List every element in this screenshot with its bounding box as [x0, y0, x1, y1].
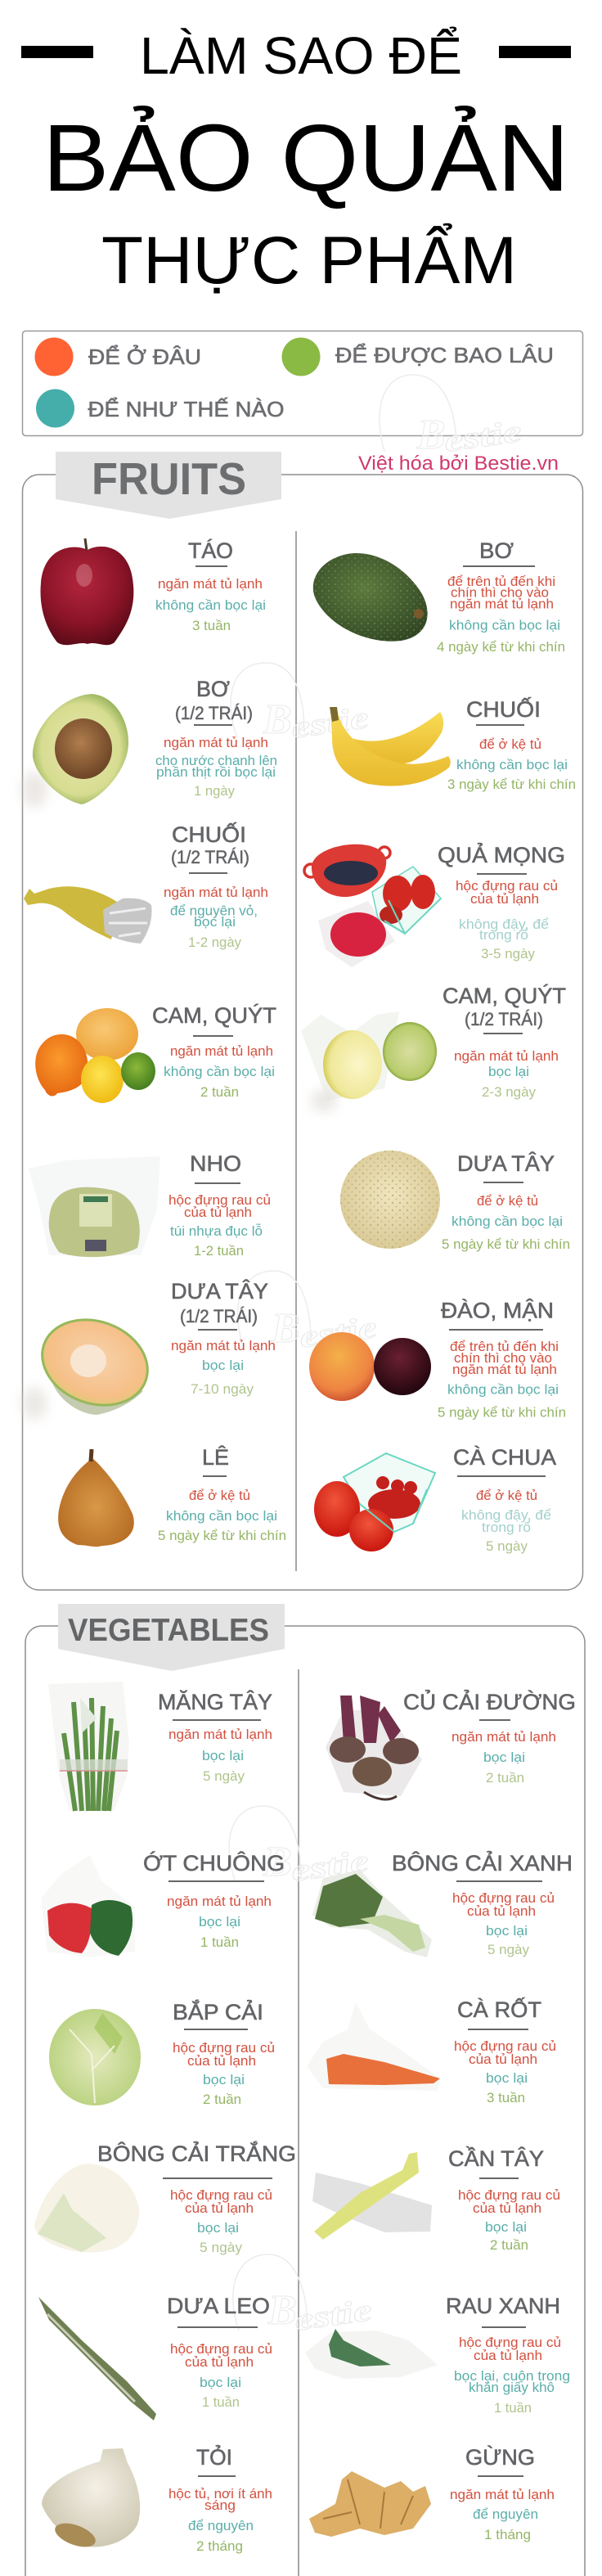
icon: carrots in bag — [307, 2002, 440, 2091]
storage text: bọc lại — [199, 1914, 240, 1930]
item: bông cải xanh — [312, 1849, 573, 1957]
storage text: ngăn mát tủ lạnh — [164, 885, 268, 900]
heading: GỪNG — [465, 2444, 535, 2470]
storage text: 1-2 tuần — [194, 1243, 244, 1259]
icon: half avocado — [21, 694, 128, 808]
item: cam quýt nửa trái — [301, 984, 566, 1112]
storage text — [442, 1193, 570, 1252]
storage text — [458, 2187, 560, 2253]
icon: citrus group — [35, 1008, 155, 1103]
storage text: ngăn mát tủ lạnh — [164, 735, 268, 750]
storage text: 5 ngày — [487, 1942, 529, 1957]
storage text — [437, 574, 565, 655]
storage text: 1-2 ngày — [188, 934, 241, 950]
storage text: 1 ngày — [194, 783, 235, 799]
watermark 2 — [231, 663, 371, 745]
icon: bell peppers in bag — [41, 1855, 135, 1957]
storage text: hộc đựng rau củ — [452, 1890, 555, 1906]
storage text: hộc tủ, nơi ít ánh — [168, 2486, 272, 2502]
icon: apple — [41, 538, 133, 645]
storage text: hộc đựng rau củ — [454, 2038, 556, 2054]
storage text — [155, 576, 266, 633]
icon: broccoli — [312, 1870, 432, 1957]
storage text: 5 ngày kể từ khi chín — [438, 1404, 566, 1421]
heading: (1/2 TRÁI) — [180, 1306, 258, 1326]
storage text: của tủ lạnh — [467, 1903, 536, 1919]
storage text: để ở kệ tủ — [476, 1488, 537, 1503]
heading: ỚT CHUÔNG — [143, 1850, 285, 1876]
icon: pear — [58, 1449, 134, 1547]
storage text: 3 tuần — [192, 618, 231, 633]
heading: RAU XANH — [446, 2294, 560, 2318]
storage text — [456, 878, 558, 961]
item: cần tây — [312, 2146, 560, 2253]
storage text — [168, 1192, 271, 1259]
heading: NHO — [190, 1151, 241, 1176]
item: quả mọng — [304, 841, 565, 967]
item: gừng — [309, 2444, 555, 2542]
storage text: hộc đựng rau củ — [456, 878, 558, 894]
item: nho — [29, 1151, 271, 1259]
storage text: túi nhựa đục lỗ — [170, 1223, 263, 1239]
heading — [171, 821, 249, 867]
heading: ĐÀO, MẬN — [441, 1298, 554, 1322]
storage text: ngăn mát tủ lạnh — [170, 1043, 273, 1059]
storage text: không cần bọc lại — [452, 1214, 563, 1229]
watermark 4 — [229, 1806, 371, 1889]
storage text: của tủ lạnh — [185, 2354, 254, 2370]
storage text: của tủ lạnh — [470, 891, 539, 907]
item: ớt chuông — [41, 1850, 285, 1957]
storage text: bọc lại — [202, 1358, 244, 1373]
panel: fruits frame — [23, 452, 582, 1590]
storage text — [452, 1729, 556, 1786]
icon: ginger — [309, 2471, 431, 2537]
heading: DƯA LEO — [167, 2294, 270, 2318]
item: lê — [58, 1444, 286, 1547]
item: bơ nửa trái — [21, 677, 277, 808]
storage text: hộc đựng rau củ — [173, 2040, 275, 2056]
panel: legend — [23, 331, 582, 435]
fruits heading tag — [56, 452, 281, 519]
storage text — [452, 1890, 555, 1957]
icon: bananas — [330, 707, 451, 786]
credit text: Việt hóa bởi Bestie.vn — [358, 453, 559, 475]
heading — [443, 984, 566, 1029]
storage text: 2 tuần — [486, 1770, 524, 1786]
storage text: chín thì cho vào — [454, 1350, 552, 1366]
storage text: cho nước chanh lên — [155, 753, 277, 768]
storage text: không cần bọc lại — [447, 1381, 559, 1398]
storage text: hộc đựng rau củ — [168, 1192, 271, 1208]
heading: CÀ CHUA — [453, 1445, 556, 1470]
storage text — [170, 2341, 272, 2410]
heading — [171, 1278, 268, 1326]
item: dưa tây — [340, 1151, 570, 1252]
watermark 1: estie — [442, 414, 524, 459]
heading: CAM, QUÝT — [443, 984, 566, 1008]
storage text — [170, 2187, 272, 2255]
storage text — [164, 885, 268, 950]
storage text: để ở kệ tủ — [189, 1488, 250, 1503]
watermark 3 — [237, 1271, 380, 1355]
storage text: của tủ lạnh — [185, 2200, 254, 2216]
storage text: không cần bọc lại — [155, 597, 266, 613]
heading: CỦ CẢI ĐƯỜNG — [403, 1688, 576, 1714]
vegetables heading tag — [58, 1604, 285, 1671]
heading: BÔNG CẢI XANH — [392, 1849, 573, 1876]
storage text: ngăn mát tủ lạnh — [168, 1727, 272, 1742]
icon: cut melon — [21, 1305, 159, 1420]
storage text: 2 tuần — [200, 1084, 239, 1100]
watermark 4: B — [263, 1839, 292, 1885]
storage text: phần thịt rồi bọc lại — [156, 764, 276, 780]
storage text — [168, 1727, 272, 1784]
storage text — [461, 1488, 551, 1554]
icon: greens in paper — [305, 2329, 438, 2379]
item: bắp cải — [49, 1998, 275, 2107]
storage text: không cần bọc lại — [456, 757, 568, 772]
storage text: để nguyên — [188, 2518, 254, 2533]
icon: cut citrus — [301, 1011, 437, 1112]
storage text: 5 ngày kể từ khi chín — [442, 1236, 570, 1252]
item: dưa tây nửa trái — [21, 1278, 276, 1420]
heading: BÔNG CẢI TRẮNG — [97, 2140, 296, 2166]
storage text: ngăn mát tủ lạnh — [452, 1362, 557, 1377]
storage text: bọc lại — [483, 1750, 525, 1765]
icon: cabbage — [49, 2009, 141, 2105]
storage text: ngăn mát tủ lạnh — [450, 596, 554, 612]
storage text — [167, 1894, 272, 1950]
heading: DƯA TÂY — [171, 1278, 268, 1304]
heading: BƠ — [196, 677, 230, 701]
watermark 5: B — [267, 2287, 297, 2334]
storage text: bọc lại — [202, 1748, 244, 1763]
storage text — [447, 736, 576, 792]
heading: TÁO — [188, 538, 233, 563]
storage text: trong rổ — [482, 1520, 531, 1535]
watermark 2: B — [263, 696, 292, 743]
storage text — [164, 1043, 275, 1100]
watermark 5 — [233, 2254, 375, 2338]
storage text — [155, 735, 277, 799]
storage text: ngăn mát tủ lạnh — [158, 576, 263, 592]
storage text: bọc lại — [194, 914, 236, 930]
icon: peach and plum — [309, 1332, 431, 1401]
item: củ cải đường — [326, 1688, 576, 1799]
storage text: 1 tuần — [200, 1934, 239, 1950]
heading: CHUỐI — [466, 696, 541, 722]
storage text — [454, 1048, 559, 1100]
legend: how long: ĐỂ ĐƯỢC BAO LÂU — [335, 343, 554, 367]
storage text: 2 tuần — [203, 2092, 241, 2107]
legend: how — [36, 390, 285, 427]
storage text: không cần bọc lại — [166, 1508, 277, 1524]
icon: cantaloupe — [340, 1151, 440, 1249]
storage text: không cần bọc lại — [449, 617, 560, 633]
storage text — [158, 1488, 286, 1543]
item: đào mận — [309, 1298, 566, 1421]
item: chuối — [330, 696, 576, 792]
storage text: của tủ lạnh — [187, 2053, 256, 2069]
heading — [175, 677, 253, 723]
item: táo — [41, 538, 266, 645]
title line 2: BẢO QUẢN — [43, 105, 569, 211]
item: bơ — [313, 538, 565, 655]
storage text: 5 ngày — [203, 1768, 245, 1784]
storage text: chín thì cho vào — [451, 584, 549, 601]
fruits heading tag: FRUITS — [92, 453, 246, 504]
storage text: 1 tuần — [202, 2394, 240, 2410]
title line 3: THỰC PHẨM — [101, 223, 517, 298]
storage text: bọc lại, cuộn trong — [454, 2368, 570, 2384]
storage text: trong rổ — [479, 927, 528, 943]
icon: garlic — [42, 2448, 140, 2551]
item: cam quýt — [35, 1003, 276, 1103]
watermark 1 — [380, 375, 524, 459]
heading: CẦN TÂY — [448, 2146, 544, 2171]
heading: BƠ — [479, 538, 514, 563]
storage text: để ở kệ tủ — [479, 736, 541, 752]
heading: (1/2 TRÁI) — [171, 847, 249, 867]
title rule right — [499, 46, 571, 58]
heading: QUẢ MỌNG — [438, 841, 565, 867]
watermark 1: B — [416, 412, 446, 458]
heading: CÀ RỐT — [457, 1996, 541, 2022]
storage text: không cần bọc lại — [164, 1064, 275, 1079]
title — [21, 25, 571, 298]
heading: (1/2 TRÁI) — [175, 703, 253, 723]
storage text: của tủ lạnh — [469, 2051, 537, 2067]
storage text: 3-5 ngày — [481, 946, 535, 961]
storage text: 1 tuần — [494, 2400, 532, 2416]
storage text — [171, 1338, 276, 1397]
storage text: 5 ngày — [200, 2240, 243, 2255]
icon: berries — [304, 844, 441, 967]
item: măng tây — [48, 1682, 272, 1811]
storage text: bọc lại — [486, 2070, 528, 2086]
item: cà chua — [314, 1445, 556, 1554]
storage text: để ở kệ tủ — [477, 1193, 538, 1209]
watermark 3: B — [271, 1305, 300, 1352]
storage text: bọc lại — [485, 2219, 527, 2235]
icon: cucumber — [38, 2297, 156, 2421]
storage text: 3 ngày kể từ khi chín — [447, 777, 576, 792]
heading: (1/2 TRÁI) — [465, 1009, 543, 1029]
storage text: 3 tuần — [487, 2090, 525, 2105]
watermark 4: estie — [289, 1844, 371, 1889]
icon: beets in bag — [326, 1696, 422, 1799]
storage text: để nguyên — [473, 2506, 538, 2522]
storage text: ngăn mát tủ lạnh — [450, 2487, 555, 2502]
icon: avocado — [313, 553, 428, 642]
storage text: để trên tủ đến khi — [447, 574, 555, 589]
storage text: bọc lại — [203, 2072, 245, 2087]
storage text — [454, 2335, 570, 2416]
storage text: ngăn mát tủ lạnh — [454, 1048, 559, 1064]
storage text — [168, 2486, 272, 2554]
item: bông cải trắng — [34, 2140, 296, 2255]
storage text: 5 ngày kể từ khi chín — [158, 1528, 286, 1543]
panel: vegetables frame — [25, 1604, 585, 2576]
storage text: để trên tủ đến khi — [450, 1339, 559, 1354]
icon: asparagus — [48, 1682, 129, 1811]
storage text: ngăn mát tủ lạnh — [167, 1894, 272, 1909]
storage text — [438, 1339, 566, 1421]
watermark 2: estie — [289, 700, 371, 745]
storage text: hộc đựng rau củ — [458, 2187, 560, 2203]
legend: how long — [281, 337, 554, 376]
icon: grapes in bag — [29, 1156, 160, 1257]
icon: cauliflower — [34, 2164, 139, 2253]
heading: TỎI — [196, 2443, 232, 2470]
storage text: hộc đựng rau củ — [170, 2187, 272, 2203]
storage text: ngăn mát tủ lạnh — [452, 1729, 556, 1745]
item: rau xanh — [305, 2294, 570, 2416]
legend: where — [34, 337, 201, 376]
storage text: ngăn mát tủ lạnh — [171, 1338, 276, 1353]
storage text: 2 tháng — [196, 2538, 243, 2554]
heading: BẮP CẢI — [173, 1998, 263, 2024]
icon: tomatoes — [314, 1453, 435, 1551]
legend: where: ĐỂ Ở ĐÂU — [88, 344, 201, 369]
storage text: hộc đựng rau củ — [459, 2335, 561, 2350]
storage text: hộc đựng rau củ — [170, 2341, 272, 2357]
storage text: 1 tháng — [484, 2527, 531, 2542]
title line 1: LÀM SAO ĐỂ — [140, 25, 462, 85]
heading: DƯA TÂY — [457, 1151, 555, 1176]
storage text: bọc lại — [197, 2220, 239, 2236]
item: dưa leo — [38, 2294, 272, 2421]
storage text: sáng — [204, 2497, 236, 2513]
storage text: không đậy, để — [459, 916, 549, 932]
item: chuối nửa trái — [24, 821, 268, 950]
watermark 3: estie — [297, 1310, 380, 1355]
storage text: để nguyên vỏ, — [170, 903, 258, 918]
storage text: 2-3 ngày — [482, 1084, 536, 1100]
storage text: 7-10 ngày — [191, 1381, 254, 1397]
title rule left — [21, 46, 93, 58]
heading: CAM, QUÝT — [152, 1003, 276, 1028]
storage text: bọc lại — [200, 2375, 241, 2390]
item: tỏi — [42, 2443, 272, 2554]
storage text: của tủ lạnh — [184, 1205, 252, 1220]
vegetables heading tag: VEGETABLES — [68, 1613, 269, 1648]
storage text: 2 tuần — [490, 2237, 528, 2253]
storage text: của tủ lạnh — [474, 2348, 542, 2363]
icon: foil banana — [24, 886, 151, 943]
heading: MĂNG TÂY — [158, 1689, 272, 1714]
icon: celery in foil — [312, 2152, 432, 2240]
heading: CHUỐI — [172, 821, 246, 847]
storage text: bọc lại — [486, 1923, 528, 1939]
storage text — [450, 2487, 555, 2542]
storage text — [173, 2040, 275, 2107]
storage text: khăn giấy khô — [469, 2380, 555, 2395]
watermark 5: estie — [292, 2293, 375, 2338]
legend: how: ĐỂ NHƯ THẾ NÀO — [88, 397, 285, 421]
storage text: 4 ngày kể từ khi chín — [437, 639, 565, 655]
storage text: không đậy, để — [461, 1507, 551, 1523]
storage text: 5 ngày — [486, 1538, 528, 1554]
storage text: của tủ lạnh — [473, 2200, 541, 2216]
storage text — [454, 2038, 556, 2105]
heading: LÊ — [202, 1444, 229, 1470]
storage text: bọc lại — [488, 1064, 529, 1079]
item: cà rốt — [307, 1996, 556, 2105]
